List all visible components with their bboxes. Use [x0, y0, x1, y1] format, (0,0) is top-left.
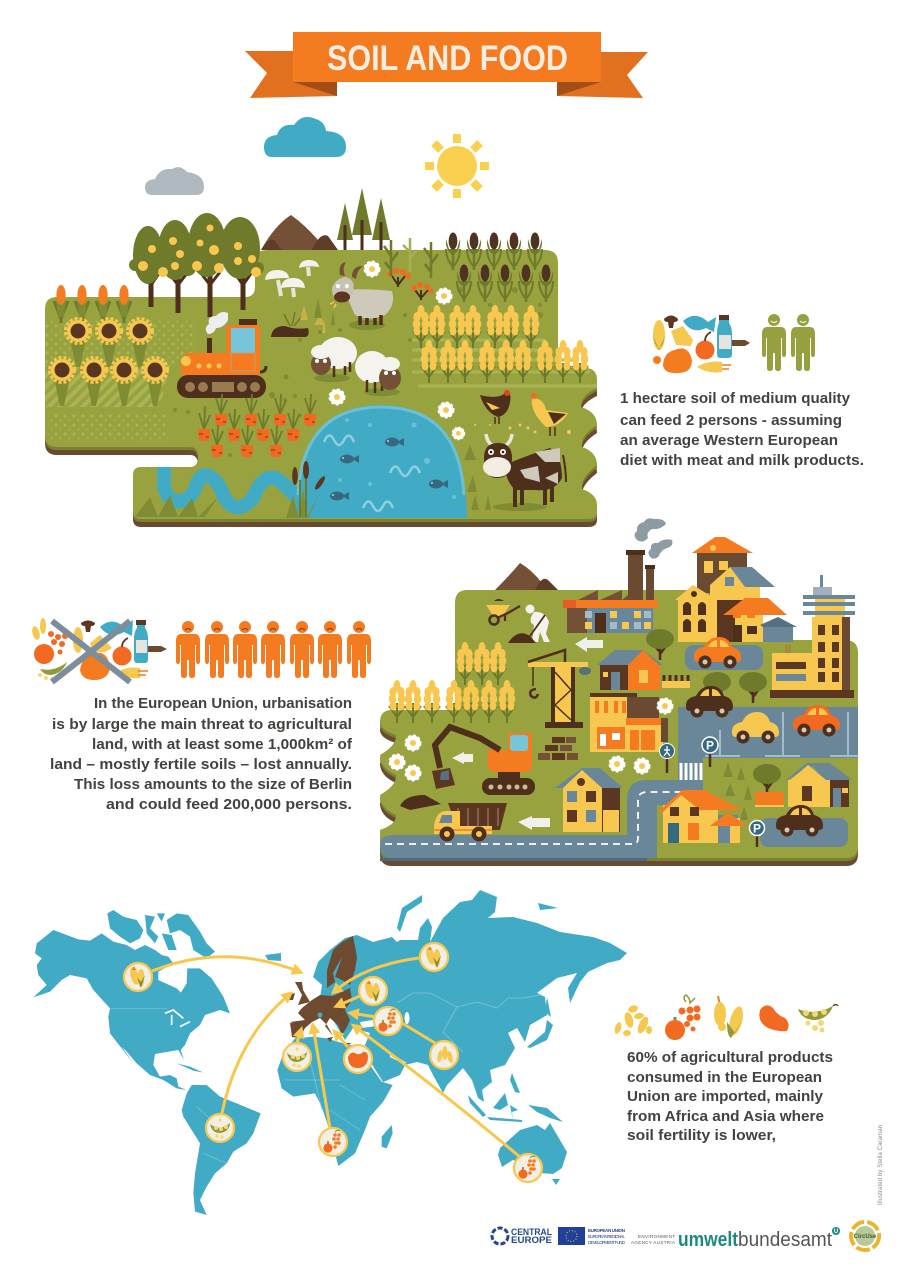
EU territory	[288, 936, 357, 1045]
title: SOIL AND FOOD	[327, 39, 568, 78]
goat	[330, 262, 393, 330]
logo: Environment Agency Austria: ENVIRONMENT	[638, 1234, 675, 1239]
parking lines and crosswalk	[681, 712, 858, 780]
world map	[33, 890, 627, 1215]
text: import fact: from Africa and Asia where	[627, 1108, 824, 1125]
factory	[563, 550, 658, 633]
wheat field	[413, 305, 588, 383]
inland seas	[360, 1012, 410, 1063]
unhappy orange persons	[176, 621, 371, 678]
icon row: imported foods	[613, 995, 838, 1040]
sunflowers	[50, 318, 168, 406]
bricks	[538, 737, 578, 760]
text: urbanisation fact: land, with at least some 1,000km² of	[92, 736, 353, 753]
logo: Central Europe	[492, 1227, 552, 1245]
text: urbanisation fact: and could feed 200,000 persons.	[106, 796, 352, 813]
icon group: lost food and unhappy persons	[31, 618, 371, 682]
the Americas	[33, 910, 261, 1215]
shop	[590, 693, 668, 752]
cross over food	[52, 621, 130, 682]
hen	[480, 390, 510, 424]
mushrooms	[265, 260, 319, 297]
origin badges	[124, 943, 542, 1182]
Great Lakes and boundaries	[110, 1008, 227, 1163]
text: import fact: soil fertility is lower,	[627, 1127, 776, 1144]
molehill	[271, 312, 309, 337]
fruit trees	[129, 213, 264, 317]
pine trees	[337, 188, 390, 255]
text: urbanisation fact: land – mostly fertile soils – lost annually.	[50, 756, 352, 773]
logo: Environment Agency Austria: umwelt	[678, 1229, 738, 1251]
logo: European Union: EUROPEAN UNION	[588, 1228, 625, 1233]
text: import fact: Union are imported, mainly	[627, 1088, 824, 1105]
logo: European Union: DEVELOPMENT FUND	[588, 1240, 626, 1245]
footer logos	[492, 1222, 879, 1251]
logo: Environment Agency Austria: AGENCY AUSTRIA	[631, 1240, 675, 1245]
mountains	[495, 563, 558, 590]
roads and parking	[380, 645, 858, 858]
icon: grains	[613, 1004, 652, 1036]
land base	[45, 250, 597, 527]
cattails and grass	[135, 461, 327, 518]
road markings	[385, 792, 690, 844]
large house	[658, 790, 747, 843]
text: hectare fact: 1 hectare soil of medium quality	[620, 390, 851, 407]
text: hectare fact	[620, 390, 864, 469]
logo: European Union	[558, 1227, 626, 1245]
carrots	[198, 394, 316, 457]
small trees	[646, 629, 781, 795]
dark corn field	[446, 232, 553, 302]
text: import fact	[627, 1049, 833, 1144]
sheep	[311, 337, 401, 396]
field textures	[45, 320, 597, 442]
text: import fact: 60% of agricultural products	[627, 1049, 833, 1066]
small cones	[464, 445, 491, 510]
text: hectare fact: diet with meat and milk products.	[620, 452, 864, 469]
text: urbanisation fact: This loss amounts to the size of Berlin	[74, 776, 352, 793]
parking signs: P	[753, 822, 761, 836]
scattered soil dots	[173, 287, 543, 457]
white flowers	[390, 698, 672, 780]
text: import fact: consumed in the European	[627, 1069, 822, 1086]
yellow house	[555, 768, 623, 832]
chicken	[531, 393, 568, 436]
Eurasia	[300, 890, 627, 1102]
text: hectare fact: can feed 2 persons - assuming	[620, 412, 842, 429]
cow	[483, 434, 566, 511]
icon: blue cloud	[264, 117, 346, 157]
tractor	[177, 312, 266, 398]
badge icons	[128, 946, 536, 1179]
title banner	[245, 32, 648, 98]
text: urbanisation fact: In the European Union, urbanisation	[94, 695, 352, 712]
illustrator credit: Illustrated by Stella Caraman	[878, 1125, 884, 1205]
happy green persons	[762, 314, 815, 371]
river	[164, 467, 298, 507]
icon: sun	[425, 134, 489, 198]
green stalks	[384, 238, 438, 278]
mountains	[261, 215, 338, 250]
logo: CircUse	[851, 1222, 879, 1250]
worker digging	[508, 604, 550, 643]
white flowers	[330, 262, 464, 439]
logo: CircUse: CircUse	[854, 1234, 877, 1240]
orange corn row	[54, 285, 131, 323]
ribbon tails	[245, 51, 648, 98]
orange berry bushes	[387, 268, 434, 300]
trade arrows	[152, 957, 520, 1157]
icon: pea pod	[798, 1004, 838, 1032]
Asian and Pacific islands, Australia	[265, 895, 567, 1185]
icon group: food feeds two persons	[653, 314, 815, 373]
land base	[380, 590, 858, 866]
pedestrian sign	[660, 744, 674, 773]
icon: grey cloud	[145, 167, 204, 195]
crane	[528, 650, 591, 728]
wheat	[389, 642, 515, 723]
factory smoke	[634, 518, 672, 559]
small cones	[723, 762, 752, 820]
orange fence	[755, 792, 784, 807]
icon: wheat and corn	[714, 996, 746, 1038]
parking signs: P	[706, 738, 714, 752]
logo: Environment Agency Austria	[631, 1227, 840, 1251]
town house cluster	[675, 537, 797, 642]
Africa boundaries	[285, 1060, 365, 1130]
cars	[686, 637, 840, 836]
food icons	[653, 315, 750, 373]
panel: urbanised landscape	[380, 518, 858, 866]
food icons	[31, 618, 167, 681]
text: hectare fact: an average Western European	[620, 432, 838, 449]
tower building	[770, 575, 855, 698]
text: urbanisation fact: is by large the main threat to agricultural	[52, 716, 352, 733]
logo: Environment Agency Austria: U	[834, 1229, 838, 1235]
ribbon centre	[293, 32, 601, 82]
fence	[662, 675, 690, 688]
icon: tomato and berries	[665, 995, 700, 1040]
white arrows	[452, 637, 603, 830]
Africa and Madagascar	[277, 1037, 393, 1166]
orange house	[597, 650, 663, 690]
parking signs	[702, 737, 764, 847]
logo: Central Europe: CENTRAL	[511, 1227, 552, 1237]
icon: orange bean	[759, 1005, 789, 1031]
pond	[295, 405, 467, 518]
logo: European Union: EUROPEAN REGIONAL	[588, 1234, 625, 1239]
wheelbarrow	[486, 599, 520, 624]
excavator	[432, 727, 535, 795]
logo: Central Europe: EUROPE	[511, 1235, 552, 1245]
logo: Environment Agency Austria: bundesamt	[738, 1229, 832, 1251]
grain scatter	[474, 424, 571, 434]
road base strip	[380, 858, 647, 861]
grass tufts	[300, 298, 335, 333]
Asian boundaries	[397, 993, 540, 1052]
panel: farm landscape	[45, 188, 597, 527]
right house	[783, 763, 852, 807]
text: urbanisation fact	[50, 695, 353, 813]
dump truck	[434, 803, 507, 842]
molehill	[400, 795, 441, 810]
